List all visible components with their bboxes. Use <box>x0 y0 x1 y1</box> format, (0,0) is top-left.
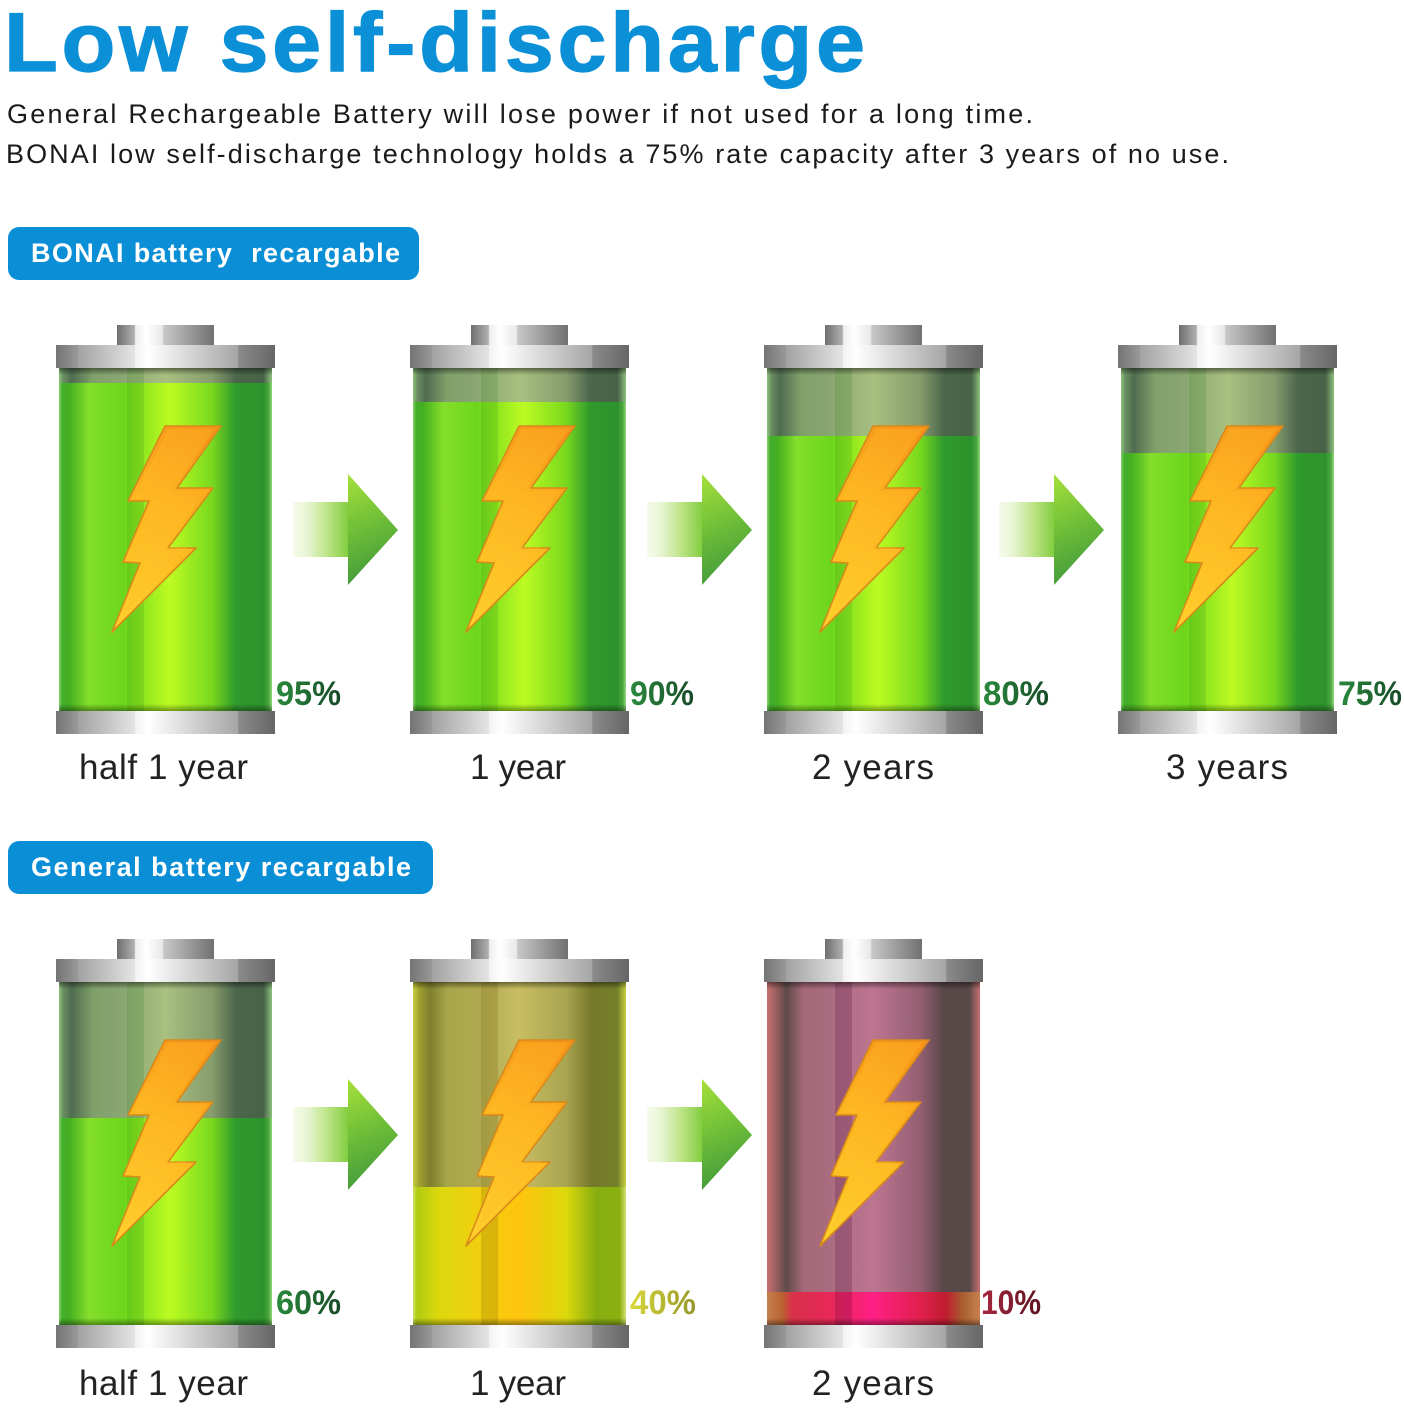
arrow <box>293 474 398 585</box>
percentage 90%: 90% <box>630 675 694 713</box>
percentage 10%: 10% <box>981 1284 1041 1322</box>
intro text: BONAI low self-discharge technology holds a 75% rate capacity after 3 years of no use. <box>6 139 1229 169</box>
time label: 3 years <box>1166 748 1288 787</box>
battery: BONAI 2 years 80% <box>764 325 983 734</box>
heading: General battery: General battery recargable <box>31 852 411 882</box>
intro text: General Rechargeable Battery will lose power if not used for a long time. <box>7 99 1033 129</box>
battery: General half 1 year 60% <box>56 939 275 1348</box>
arrow <box>647 1079 752 1190</box>
heading: General battery <box>8 841 433 894</box>
time label: half 1 year <box>79 748 248 787</box>
arrow <box>647 474 752 585</box>
percentage 60%: 60% <box>276 1284 341 1322</box>
time label: 2 years <box>812 748 934 787</box>
battery: BONAI half 1 year 95% <box>56 325 275 734</box>
time label: 1 year <box>470 748 566 787</box>
heading: BONAI battery <box>8 227 419 280</box>
time label: 1 year <box>470 1364 566 1403</box>
battery: General 1 year 40% <box>410 939 629 1348</box>
percentage 95%: 95% <box>276 675 341 713</box>
arrow <box>293 1079 398 1190</box>
time label: 2 years <box>812 1364 934 1403</box>
battery: General 2 years 10% <box>764 939 983 1348</box>
battery: BONAI 3 years 75% <box>1118 325 1337 734</box>
heading: BONAI battery: BONAI battery recargable <box>31 238 400 268</box>
battery: BONAI 1 year 90% <box>410 325 629 734</box>
percentage 80%: 80% <box>983 675 1049 713</box>
intro text <box>6 99 1229 169</box>
percentage 40%: 40% <box>630 1284 696 1322</box>
time label: half 1 year <box>79 1364 248 1403</box>
arrow <box>999 474 1104 585</box>
